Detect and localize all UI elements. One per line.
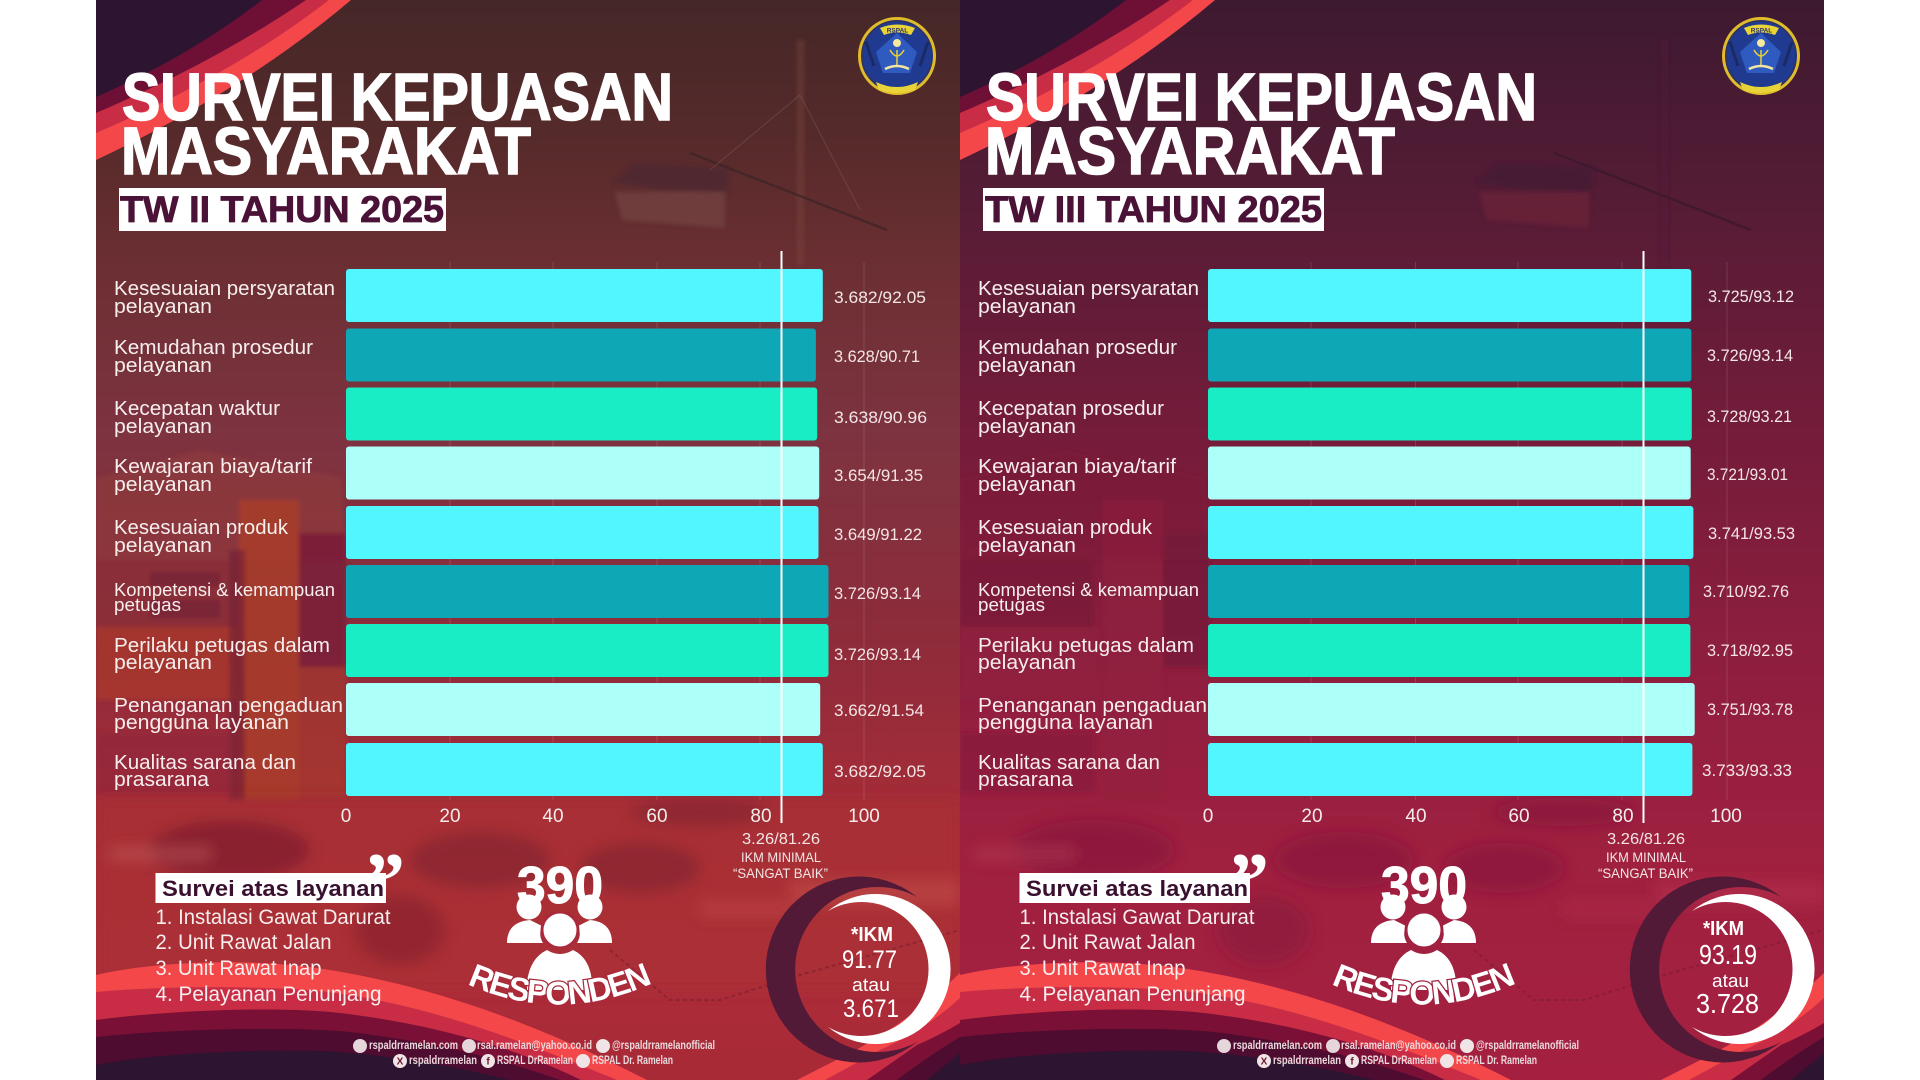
category labels: petugas — [114, 595, 181, 615]
panel: services surveyed: Survei atas layanan — [1026, 876, 1248, 901]
panel: services surveyed: 4. Pelayanan Penunjang — [1020, 983, 1246, 1006]
chart axis: 60 — [1508, 806, 1530, 827]
category labels: Penanganan pengaduan — [978, 695, 1207, 717]
threshold caption: IKM MINIMAL — [1606, 849, 1686, 865]
threshold caption — [1598, 831, 1693, 881]
threshold caption: 3.26/81.26 — [742, 831, 820, 848]
category labels: prasarana — [114, 769, 210, 791]
category labels: Kompetensi & kemampuan — [978, 580, 1199, 600]
panel: services surveyed: ” — [365, 838, 405, 926]
contact footer: RSPAL DrRamelan — [1361, 1055, 1437, 1067]
subtitle: period label: TW III TAHUN 2025 — [985, 189, 1322, 230]
respondents count with people icon: RESPONDEN — [1333, 963, 1515, 1005]
panel: services surveyed — [1020, 854, 1266, 1006]
contact footer: RSPAL DrRamelan — [497, 1055, 573, 1067]
threshold caption: IKM MINIMAL — [741, 849, 821, 865]
value labels: 3.721/93.01 — [1707, 466, 1788, 484]
category labels: Kecepatan waktur — [114, 398, 280, 420]
threshold caption: “SANGAT BAIK” — [733, 865, 828, 881]
value labels: 3.725/93.12 — [1708, 288, 1794, 306]
chart axis: 100 — [1710, 806, 1742, 827]
category labels: pelayanan — [978, 652, 1076, 674]
value labels: 3.718/92.95 — [1707, 642, 1793, 660]
bar chart: survey scores — [1208, 251, 1727, 823]
contact footer: rspaldrramelan — [1273, 1055, 1341, 1067]
contact footer: @rspaldrramelanofficial — [612, 1040, 715, 1052]
icon: RSPAL logo — [1724, 18, 1798, 94]
category labels: Penanganan pengaduan — [114, 695, 343, 717]
category labels: Kemudahan prosedur — [114, 337, 313, 359]
category labels: Kesesuaian persyaratan — [978, 278, 1199, 300]
category labels: pelayanan — [978, 474, 1076, 496]
panel: services surveyed: 3. Unit Rawat Inap — [1020, 957, 1186, 980]
contact footer — [353, 1039, 715, 1068]
category labels: pengguna layanan — [978, 712, 1153, 734]
category labels: Kesesuaian produk — [114, 517, 289, 539]
threshold caption: “SANGAT BAIK” — [1598, 865, 1693, 881]
value labels — [834, 289, 927, 781]
contact footer: f — [1350, 1056, 1354, 1068]
category labels: pelayanan — [978, 355, 1076, 377]
value labels: 3.682/92.05 — [834, 763, 926, 781]
category labels: pelayanan — [114, 296, 212, 318]
contact footer: rspaldrramelan.com — [1233, 1040, 1322, 1052]
title: MASYARAKAT — [985, 114, 1395, 189]
chart axis — [1204, 808, 1742, 822]
contact footer — [1217, 1039, 1579, 1068]
panel: services surveyed: 2. Unit Rawat Jalan — [156, 931, 332, 954]
title: SURVEI KEPUASAN — [986, 60, 1537, 135]
decorative bottom waves — [960, 962, 1824, 1080]
panel: services surveyed: 3. Unit Rawat Inap — [156, 957, 322, 980]
value labels: 3.662/91.54 — [834, 702, 924, 720]
respondents count with people icon — [469, 866, 652, 1005]
category labels — [114, 278, 343, 791]
IKM score ring: atau — [1712, 971, 1749, 991]
chart axis: 100 — [848, 806, 880, 827]
decorative corner arcs: top left — [96, 0, 351, 160]
IKM score ring: 91.77 — [842, 946, 897, 974]
contact footer: X — [397, 1056, 404, 1068]
chart axis: 80 — [750, 806, 772, 827]
category labels: pelayanan — [978, 416, 1076, 438]
category labels: pelayanan — [978, 296, 1076, 318]
contact footer: rsal.ramelan@yahoo.co.id — [1341, 1040, 1456, 1052]
panel: services surveyed — [156, 854, 402, 1006]
chart axis: 40 — [1405, 806, 1427, 827]
value labels — [1702, 288, 1795, 780]
contact footer: RSPAL Dr. Ramelan — [1456, 1055, 1537, 1067]
threshold line — [780, 251, 782, 823]
category labels: Kewajaran biaya/tarif — [978, 456, 1176, 478]
title: SURVEI KEPUASAN — [122, 60, 673, 135]
IKM score ring: *IKM — [1703, 918, 1744, 940]
contact footer: @rspaldrramelanofficial — [1476, 1040, 1579, 1052]
panel: services surveyed: 1. Instalasi Gawat Darurat — [1020, 906, 1255, 929]
contact footer: f — [486, 1056, 490, 1068]
chart axis — [342, 808, 880, 822]
value labels: 3.741/93.53 — [1708, 525, 1795, 543]
chart axis: 20 — [439, 806, 461, 827]
value labels: 3.751/93.78 — [1707, 701, 1793, 719]
threshold line — [1642, 251, 1644, 823]
value labels: 3.682/92.05 — [834, 289, 926, 307]
respondents count with people icon — [1333, 866, 1515, 1005]
respondents count with people icon: RESPONDEN — [469, 963, 652, 1005]
category labels: pelayanan — [114, 474, 212, 496]
chart axis: 40 — [542, 806, 564, 827]
value labels: 3.726/93.14 — [834, 585, 921, 603]
threshold caption — [733, 831, 828, 881]
chart axis: 20 — [1301, 806, 1323, 827]
icon: RSPAL logo: RSPAL — [1751, 28, 1772, 34]
value labels: 3.649/91.22 — [834, 526, 922, 544]
contact footer: RSPAL Dr. Ramelan — [592, 1055, 673, 1067]
decorative corner arcs: top left — [960, 0, 1215, 160]
title: MASYARAKAT — [121, 114, 531, 189]
value labels: 3.654/91.35 — [834, 467, 923, 485]
category labels: pelayanan — [114, 535, 212, 557]
value labels: 3.733/93.33 — [1702, 762, 1792, 780]
category labels: Kewajaran biaya/tarif — [114, 456, 312, 478]
panel: TW II 2025 — [96, 0, 960, 1080]
category labels: Kompetensi & kemampuan — [114, 580, 335, 600]
IKM score ring: 3.728 — [1696, 988, 1759, 1019]
contact footer: rsal.ramelan@yahoo.co.id — [477, 1040, 592, 1052]
value labels: 3.726/93.14 — [1707, 347, 1793, 365]
threshold caption: 3.26/81.26 — [1607, 831, 1685, 848]
contact footer: X — [1261, 1056, 1268, 1068]
panel: services surveyed: ” — [1229, 838, 1269, 926]
IKM score ring — [766, 876, 951, 1062]
contact footer: rspaldrramelan.com — [369, 1040, 458, 1052]
IKM score ring: 93.19 — [1699, 939, 1757, 970]
decorative bottom waves — [96, 962, 960, 1080]
chart axis: 80 — [1612, 806, 1634, 827]
title — [122, 72, 670, 176]
category labels: Kualitas sarana dan — [978, 752, 1160, 774]
value labels: 3.728/93.21 — [1707, 408, 1792, 426]
IKM score ring: atau — [852, 975, 890, 995]
bar chart: survey scores — [346, 251, 864, 823]
panel: services surveyed: 1. Instalasi Gawat Darurat — [156, 906, 391, 929]
category labels: Kualitas sarana dan — [114, 752, 296, 774]
category labels: petugas — [978, 595, 1045, 615]
contact footer: rspaldrramelan — [409, 1055, 477, 1067]
panel: services surveyed: 2. Unit Rawat Jalan — [1020, 931, 1196, 954]
value labels: 3.726/93.14 — [834, 646, 921, 664]
category labels: Kesesuaian produk — [978, 517, 1153, 539]
category labels: Kesesuaian persyaratan — [114, 278, 335, 300]
category labels: pengguna layanan — [114, 712, 289, 734]
background photo: hospital building and ship mast, dark crimson tint — [960, 0, 1824, 1080]
chart axis: 0 — [1203, 806, 1213, 827]
chart axis: 60 — [646, 806, 668, 827]
value labels: 3.710/92.76 — [1703, 583, 1789, 601]
IKM score ring — [1630, 876, 1815, 1062]
category labels: pelayanan — [114, 355, 212, 377]
respondents count with people icon: 390 — [517, 857, 603, 915]
panel: services surveyed: 4. Pelayanan Penunjang — [156, 983, 382, 1006]
category labels — [978, 278, 1207, 791]
category labels: pelayanan — [114, 416, 212, 438]
value labels: 3.628/90.71 — [834, 348, 920, 366]
category labels: Kemudahan prosedur — [978, 337, 1177, 359]
category labels: Perilaku petugas dalam — [114, 635, 330, 657]
chart axis: 0 — [341, 806, 351, 827]
value labels: 3.638/90.96 — [834, 409, 927, 427]
category labels: pelayanan — [114, 652, 212, 674]
category labels: Kecepatan prosedur — [978, 398, 1164, 420]
panel: services surveyed: Survei atas layanan — [162, 876, 384, 901]
subtitle: period label: TW II TAHUN 2025 — [120, 189, 444, 230]
IKM score ring: 3.671 — [843, 995, 899, 1023]
icon: RSPAL logo — [860, 18, 934, 94]
background photo: hospital building and ship mast, red tint — [96, 0, 960, 1080]
category labels: pelayanan — [978, 535, 1076, 557]
IKM score ring: *IKM — [851, 924, 893, 946]
icon: RSPAL logo: RSPAL — [887, 28, 908, 34]
category labels: prasarana — [978, 769, 1074, 791]
panel: TW III 2025 — [960, 0, 1824, 1080]
title — [986, 72, 1534, 176]
category labels: Perilaku petugas dalam — [978, 635, 1194, 657]
respondents count with people icon: 390 — [1381, 857, 1467, 915]
